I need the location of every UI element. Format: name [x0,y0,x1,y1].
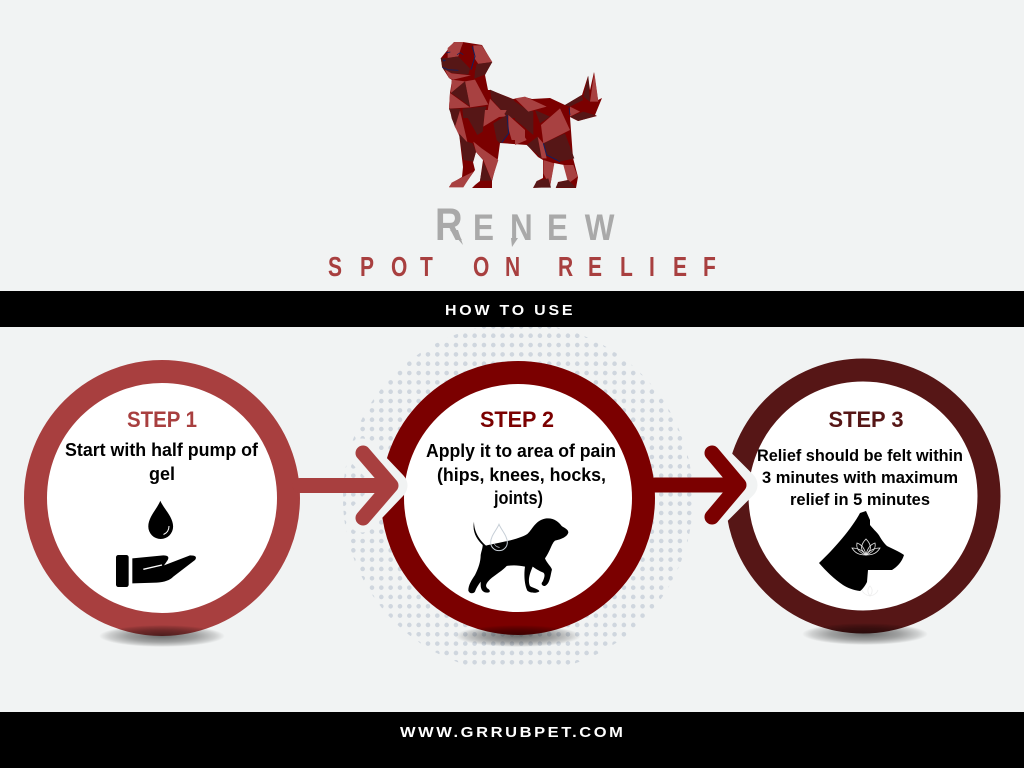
step 3 text: relief in 5 minutes [790,491,930,509]
logo wordmark: Renew: R [435,199,463,250]
icon: dog head with lotus [819,511,904,596]
icon: water drop [148,501,173,539]
icon: polygon dog logo [441,42,602,188]
footer bar: website: WWW.GRRUBPET.COM [400,725,626,741]
logo wordmark: Renew: N [510,208,533,249]
logo wordmark: Renew [435,199,615,250]
logo tagline: Spot On Relief: SPOT ON RELIEF [328,252,716,283]
panel: step 1 [36,372,288,647]
step 2 shadow [455,625,581,647]
step 1 shadow [99,625,225,647]
step 3 text [757,447,963,509]
step 1 ring [36,372,288,624]
dog front leg facets [449,110,525,187]
arrow: step 1 to step 2 [300,453,393,518]
logo wordmark: Renew: E [473,208,494,249]
step 3 text: Relief should be felt within [757,447,963,465]
step 3 text: 3 minutes with maximum [762,469,958,487]
icon: dog with drop [468,518,568,593]
step 1 text: gel [149,464,175,484]
step 2 heading: STEP 2 [480,407,554,432]
panel: step 3 [737,370,989,645]
icon: open hand [116,555,196,587]
step 2 ring [392,372,644,624]
header bar: how to use: HOW TO USE [445,303,575,319]
logo wordmark: Renew: W [585,208,615,249]
arrow: step 2 to step 3 [655,453,743,517]
footer bar: website [0,712,1024,768]
step 2 text: (hips, knees, hocks, [437,465,606,485]
step 1 text [65,440,259,484]
dotted halo behind step 2 [344,326,694,662]
step 3 ring [737,370,989,622]
step 2 text [426,441,616,508]
step 3 heading: STEP 3 [828,407,904,432]
dog rear and tail facets [515,72,598,188]
step 3 shadow [802,623,928,645]
step 2 text: Apply it to area of pain [426,441,616,461]
dog head and chest facets [441,42,520,118]
logo wordmark: Renew: E [547,208,568,249]
step 1 text: Start with half pump of [65,440,259,460]
panel: step 2 [392,372,644,647]
step 2 text: joints) [493,488,543,508]
step 1 heading: STEP 1 [127,407,197,432]
header bar: how to use [0,291,1024,327]
